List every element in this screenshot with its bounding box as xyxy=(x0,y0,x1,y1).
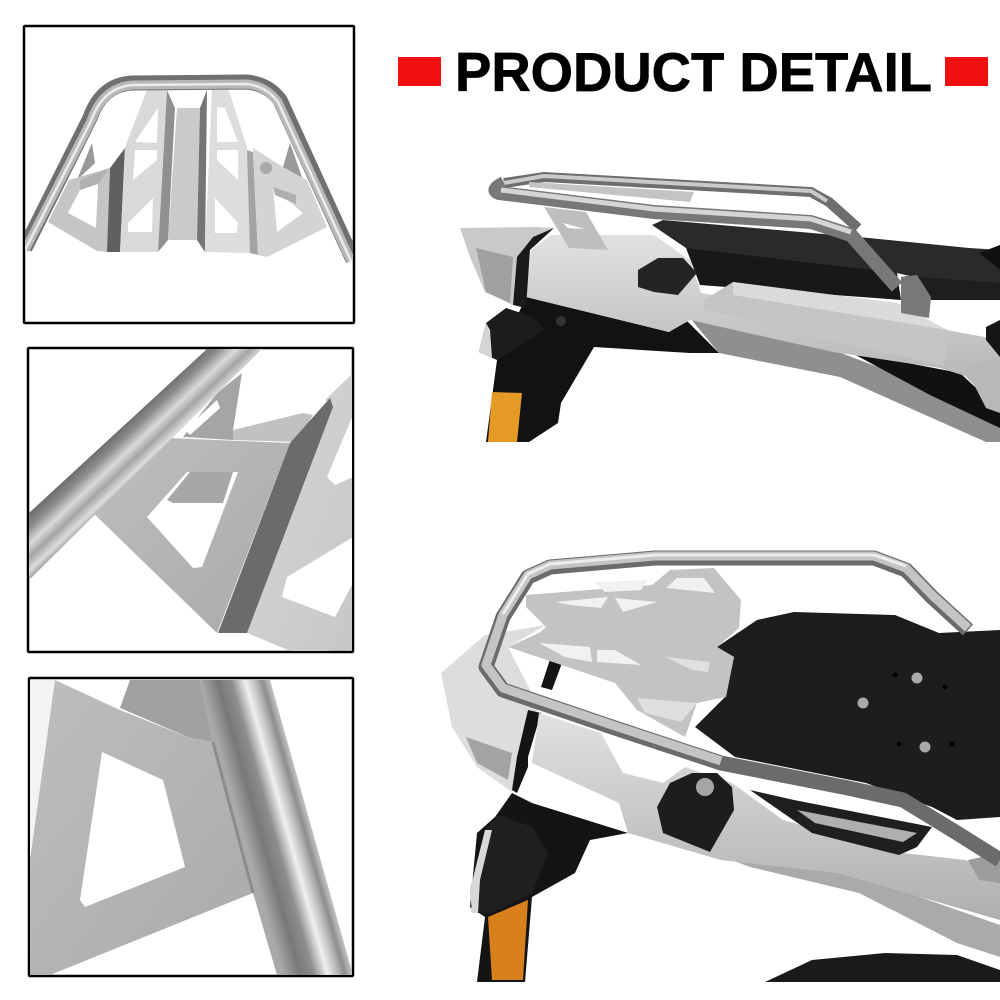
heading: product detail: PRODUCT DETAIL xyxy=(455,42,932,103)
rack tubes xyxy=(504,177,858,228)
tail light xyxy=(460,227,554,305)
seat bolts xyxy=(858,672,954,752)
silver frame body xyxy=(526,235,1000,385)
photo: rack mounted on motorcycle, rear three-quarter view xyxy=(441,555,1000,982)
rack foot bracket xyxy=(901,275,931,318)
tyre xyxy=(765,953,1000,982)
right end block xyxy=(974,385,1000,413)
panel: weld close-up with triangular cut-out xyxy=(28,348,353,652)
rack tube xyxy=(486,558,1000,860)
side rail xyxy=(704,282,947,366)
rear end bracket xyxy=(968,857,1000,883)
swingarm tube xyxy=(736,862,1000,957)
reflector xyxy=(488,900,528,980)
rubber block xyxy=(657,773,734,852)
panel: gusset plate close-up xyxy=(29,678,353,976)
turn signal xyxy=(470,815,548,913)
seat plate xyxy=(652,220,1000,283)
black frame slot xyxy=(750,790,932,855)
rubber block xyxy=(638,258,697,295)
rack plate xyxy=(508,568,741,737)
silver body xyxy=(532,713,1000,920)
turn signal xyxy=(479,308,545,360)
black pillar xyxy=(512,661,562,793)
mudguard and black bracket xyxy=(486,297,719,442)
panel: top view of rack detail xyxy=(24,26,354,323)
black seat plate xyxy=(695,612,1000,820)
photo: rack mounted on motorcycle, side view xyxy=(460,176,1000,442)
reflector xyxy=(488,392,522,442)
mudguard bracket xyxy=(470,793,628,982)
swingarm tube xyxy=(690,318,1000,442)
rack plate xyxy=(544,207,608,250)
tail light xyxy=(441,625,546,792)
